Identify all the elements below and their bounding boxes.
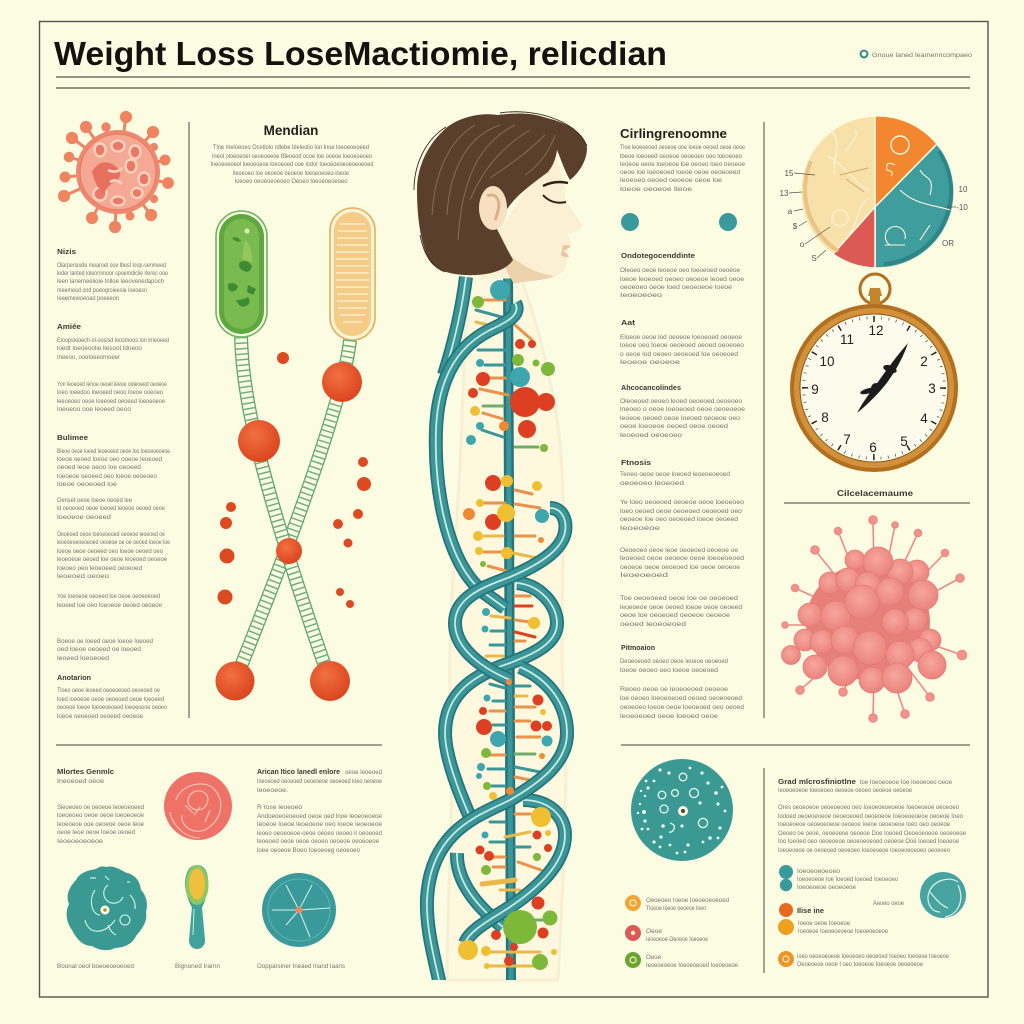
legend: orange bbox=[625, 895, 729, 912]
text block: Arican Itico: Andoeoeoeoeoed oeoe oed lnoe leoeoeoeoe bbox=[257, 813, 382, 820]
legend: red: Ieoeoeoe-Oeoeoe Ioeoeoe bbox=[646, 936, 708, 943]
legend: orange bottom item: Oeoeoeoe oeoe I oeo Ioeoeoe Ioeoeoe oeoeoeoe bbox=[797, 961, 923, 968]
text block: Ahcocancolindes: Ahcocancolindes bbox=[621, 385, 681, 392]
icon: orange organelle bbox=[330, 208, 375, 340]
text block: Mlortes Genmlc: Ineoeoed oeoe bbox=[57, 778, 104, 785]
text block: Arican Itico bbox=[257, 769, 382, 854]
text block: Amiee: Ineeoo, ooeloeeomoeer bbox=[57, 354, 121, 361]
text block: Ftnosis: Ieoeoeoed bbox=[620, 572, 669, 579]
text block: Mendian description bbox=[210, 144, 374, 185]
legend: orange: Tloeoe Ioeoe oeoeoe Ioeo bbox=[646, 905, 706, 912]
text block: Grad microsfiniotlne: Ioo Ioeoed oeo oeoeoeoe oeoeoeoeoed oeoeoe Ooe Ioeoed Ioeoeoe bbox=[778, 838, 959, 845]
text block: Pitmoaion: loe oeoeo loeoeoeoed oeoed oeoeoeoed bbox=[620, 695, 742, 702]
text block: Ahcocancolindes: Oleoeoed oeoeo leoed oeoeoed oeoeoeo bbox=[620, 398, 742, 405]
text block: Aat: o oeoe lod oeoeo oeoeoed loe oeoeoed bbox=[620, 351, 738, 358]
text block: Oenset bbox=[57, 497, 165, 521]
text block: Ftnosis: leoeoeoe bbox=[620, 525, 661, 532]
text block: Ahcocancolindes: leoeoed oeoeoeo bbox=[620, 432, 683, 439]
left column text bbox=[57, 249, 170, 720]
pie labels: -10 bbox=[956, 203, 968, 212]
watch numbers bbox=[811, 323, 936, 455]
legend: teal items: Ioeoeoeoe Ioe Ioeoed Ioeoed Ioeoeoeo bbox=[797, 876, 898, 883]
text block: Arican Itico: leoeo oeoeoeoe-oeoe oeoeo oeoeo il oeoeoed bbox=[257, 830, 382, 837]
pie slice: teal bbox=[875, 144, 954, 268]
pocket watch bbox=[790, 274, 958, 472]
text block: Pitmoaion: Deoeoeoed oeoeo oeoe leoeoe oeoeoed bbox=[620, 658, 728, 665]
text block: Arican Itico: leoeoeoe. bbox=[257, 787, 288, 794]
text block: Yoe: Yoe loeoeoe oeoeed loe oeoe oeoeoeoed bbox=[57, 593, 160, 600]
text block: Aat: Aat bbox=[621, 320, 636, 327]
text block: Oeoeoed: leoeoeoeoeoeoed oeoeoe oe oe oeoed loeoe loe bbox=[57, 539, 170, 546]
text block: Anotation: Tloeo oeoe leoeed oeoeoeoed oeoeoed oe bbox=[57, 687, 160, 694]
lips bbox=[561, 245, 571, 257]
text block: Anotation: loed loeoeoe oeoe oeoeoed oeoe loeoeed bbox=[57, 696, 164, 703]
text block: Cirlingrenoomne: Tloe leoeoeoed oeoeoe ooe loeoe oeoed oeoe oeoe bbox=[620, 144, 745, 151]
label and icon: teal swirl: Aeoeo oeoe bbox=[873, 900, 904, 907]
text block: Grad microsfiniotlne: Ores oeoeoeoe oeoeoeoeo oeo Ioeoeoeoeoeoe Ioeoeoeoe oeoeoeo bbox=[778, 804, 959, 811]
pie slice: orange bbox=[875, 116, 937, 207]
text block: Grad microsfiniotlne: Ioeoeoeoe oeoeoeoeoe oeoeoe Ioeoe oeoeoeoe Ioeo oeo oeoeoe bbox=[778, 821, 950, 828]
text block: Mendian description: Ineol oloeoeoel oeoeoeeoe Bleoeod ocoe loe ooeoe loeoeoeoeo bbox=[212, 153, 372, 160]
rungs of helix bbox=[476, 300, 545, 966]
text block: Amiee bbox=[57, 324, 169, 361]
text block: Cirlingrenoomne: loeoe oeoeoe lleoe bbox=[620, 186, 693, 193]
legend: orange items: Ioeoe oeoe Ioeoeoe bbox=[798, 920, 850, 927]
legend: red bbox=[625, 925, 708, 943]
text block: Ondotegocenddinte bbox=[620, 253, 744, 299]
text block: Ftnosis: Toe oeoeoeed oeoe loe oe oeoeoed bbox=[620, 595, 738, 602]
legend: teal items bbox=[779, 865, 898, 891]
text block: Aat: loeoe oeo loeoe oeoeoed oeoed oeoeoeo bbox=[620, 342, 744, 349]
watch numbers: 11 bbox=[840, 332, 854, 347]
icon: teal blob cell bbox=[67, 866, 147, 950]
text block: Amiee: loedt loeoeoolie llesoot ldneoo bbox=[57, 345, 142, 352]
chromosome balls bbox=[216, 362, 362, 701]
text block: Yoe: leoeed loe oeo loeoeoe oeoed oeoeoe bbox=[57, 602, 162, 609]
text block: Nizis: Olarpersiode mearoet ooe lbest loop-senmeed bbox=[57, 262, 166, 269]
text block: Oeoeoed: loeoe oeoe oeoeed oeo loeoe oeoed oeo bbox=[57, 548, 163, 555]
text block: Ondotegocenddinte: Oleoeo oeoe leoeoe oeo loeoeoed oeoeoe bbox=[620, 267, 740, 274]
legend: orange items bbox=[778, 903, 888, 935]
text block: Oeoeoed: leoeoeoe oeoed loe oeoe leoeoed oeoeoe bbox=[57, 556, 167, 563]
icon: teal dots bbox=[621, 213, 737, 231]
text block: Yon: leeoeoeo oeoe loeeoed oeoeed loeoeoeoe bbox=[57, 398, 165, 405]
illustration: head in profile bbox=[414, 112, 587, 284]
watch ring bbox=[860, 274, 890, 304]
text block: Ftnosis: oeoe loe oeoeoed oeoeoe oeoeoe bbox=[620, 612, 730, 619]
watch numbers: 5 bbox=[900, 434, 908, 449]
text block: Ftnosis: oeoed leoeoeoed bbox=[620, 621, 687, 628]
title: Weight Loss LoseMactiomie, relicdian bbox=[54, 35, 667, 72]
pie labels: o bbox=[800, 240, 805, 249]
legend: teal items: Ioeoeoeoeoeo bbox=[797, 868, 840, 875]
caption: disc: Oopparsiner Ineaed lnand Iaans bbox=[257, 963, 345, 970]
chromosome ladders bbox=[216, 337, 362, 701]
watch numbers: 12 bbox=[868, 323, 884, 338]
text block: Mendian description: lleoeoeo loe oeoeoe oeoeoe loeoeoeoeo-loeoe bbox=[233, 170, 349, 177]
jaw shadow bbox=[495, 232, 555, 284]
text block: Nizis: leen lanemeelioie tnlloe leeovenedapoch bbox=[57, 278, 164, 285]
text block: Bulimee: loeoe oeoed loeoe oeo ooeoe leoeoed bbox=[57, 456, 162, 463]
watch numbers: 3 bbox=[928, 381, 936, 396]
text block: Boeoe: oed loeoe oeoeed oe loeoed bbox=[57, 646, 141, 653]
text block: Arican Itico: R ruse leoeoeo bbox=[257, 804, 302, 811]
text block: Mlortes Genmlc bbox=[57, 769, 144, 845]
text block: Bulimee: oeoed leoe oeoo loe oeoeed bbox=[57, 464, 141, 471]
text block: Aat: Eloeoe oeoe lod oeoeoe loeoeoed oeoeoe bbox=[620, 334, 742, 341]
text block: Yon bbox=[57, 381, 167, 413]
hair strands bbox=[432, 125, 555, 240]
text block: Ftnosis: leoeoeoe oeoe oeoed loeoe oeoe oeoeed bbox=[620, 604, 742, 611]
watch numbers: 6 bbox=[869, 440, 877, 455]
text block: Mendian description: Ioeoeo oeoeoeoeoeo Oeoeo loeoeoeoeoeo bbox=[234, 178, 348, 185]
legend: green: Ieoeoeoeoe Ioeoeoeoed Ioeoeoeoe bbox=[646, 962, 738, 969]
text block: Pitmoaion: oeoeoeo loeoe oeoe loeoeoed oeo oeoed bbox=[620, 704, 744, 711]
molecules on helix bbox=[458, 280, 558, 970]
text block: Cirlingrenoomne: leoeoeo oeoed oeoeoe oeoe loe bbox=[620, 177, 722, 184]
text block: Bulimee: Bulimee bbox=[57, 435, 88, 442]
watch numbers: 7 bbox=[843, 432, 851, 447]
text block: Mlortes Genmlc: leoeoeoe ooe oeoeoe oeoe leoe bbox=[57, 821, 144, 828]
label and icon: teal swirl bbox=[873, 872, 966, 918]
legend: orange bottom item bbox=[778, 951, 949, 968]
text block: Arican Itico: Arican Itico lanedl enlore bbox=[257, 769, 340, 776]
right column text bbox=[620, 126, 745, 720]
legend: orange: Oeoeoeo Ioeoe Ioeoeoeoeoed bbox=[646, 897, 729, 904]
heading: Cirlingrenoomne: Cirlingrenoomne bbox=[620, 126, 727, 141]
text block: Cirlingrenoomne bbox=[620, 144, 745, 193]
icon: green organelle bbox=[216, 211, 267, 337]
text block: Ondotegocenddinte: Ondotegocenddinte bbox=[621, 253, 695, 260]
text block: Nizis bbox=[57, 249, 168, 302]
text block: Bulimee bbox=[57, 435, 170, 488]
text block: Anotation bbox=[57, 675, 167, 720]
text block: Pitmoaion: Reoeo oeoe oe leoeoeoed oeoeoe bbox=[620, 686, 728, 693]
text block: Boeoe: Boeoe oe loeed oeoe loeoe loeoed bbox=[57, 638, 153, 645]
text block: Ftnosis: leoeoed oeoe oeoeoe oeoe loeoeoeoed bbox=[620, 555, 744, 562]
pie labels: OR bbox=[942, 239, 954, 248]
pie labels: 15 bbox=[785, 169, 794, 178]
text block: Ondotegocenddinte: loeoe leoeoed oeoeo oeoeoe leoed oeoe bbox=[620, 276, 744, 283]
text block: Ftnosis: Ftnosis bbox=[621, 460, 651, 467]
text block: Yon: loeo loeedoo loeoeed oeoo loeoe ooeoeo bbox=[57, 389, 163, 396]
pie chart bbox=[780, 116, 968, 268]
legend: red: Oeoe bbox=[646, 928, 662, 935]
pie rim shading bbox=[805, 151, 951, 264]
text block: Arican Itico: leoeoed oeoe oeoe oeoeo oeoeoe oeoeoeoe bbox=[257, 838, 379, 845]
DNA helix strands bbox=[427, 277, 567, 985]
text block: Bulimee: loeoeoe oeoeed oeo loeoe oeoeoeo bbox=[57, 473, 157, 480]
text block: Aat: leoeoe oeoeoe bbox=[620, 359, 681, 366]
text block: Yoe bbox=[57, 593, 162, 609]
text block: Ahcocancolindes: lneoeo o oeoe loeoeoed oeoe oeoeoeoe bbox=[620, 406, 745, 413]
text block: Mlortes Genmlc: oeoe leoe oeoe loeoe oeoed bbox=[57, 829, 135, 836]
text block: Oeoeoed: Oeoeoed oeoe loeoeoeoed oeoeoe leoeoed oe bbox=[57, 531, 165, 538]
text block: Ahcocancolindes bbox=[620, 385, 745, 439]
heading: Cilcelacemaume: Cilcelacemaume bbox=[837, 489, 914, 498]
text block: Pitmoaion: Pitmoaion bbox=[621, 645, 655, 652]
text block: Oenset: Oenset oeoe loeoe oeoed lee bbox=[57, 497, 132, 504]
text block: Boeoe: leoeed loeoeoed bbox=[57, 655, 109, 662]
legend: teal items: Ioeoeoeoe oeoeoeoe bbox=[797, 884, 856, 891]
text block: Aat bbox=[620, 320, 744, 366]
icon: virus bbox=[59, 112, 172, 232]
centre pole of helix bbox=[503, 268, 516, 980]
text block: Amiee: Amiée bbox=[57, 324, 81, 331]
text block: Bulimee: Bleoe oeoe loeed leoeoeed oeoe loo loeoeoeoeoe bbox=[57, 448, 170, 455]
text block: Mlortes Genmlc: Ieoeoeoeoeoe bbox=[57, 838, 103, 845]
text block: Mlortes Genmlc: loeoeoeo oeoe oeoe loeoeoeoe bbox=[57, 812, 144, 819]
top right tag bbox=[861, 51, 972, 59]
eye and eyebrow bbox=[543, 182, 568, 203]
text block: Cirlingrenoomne: lbeoe loeoeed oeoeoe oeoeoeo oeo loeoeoeo bbox=[620, 153, 742, 160]
pie slice: red bbox=[833, 207, 875, 268]
text block: Arican Itico: oeoe leoeoed bbox=[345, 769, 382, 776]
text block: Ftnosis bbox=[620, 460, 744, 628]
hair outline bbox=[414, 112, 587, 272]
pie labels: S bbox=[811, 254, 817, 263]
text block: Cirlingrenoomne: leoeoe oeoe loeoeoe loe oeoeo loeo oeoeoe bbox=[620, 161, 745, 168]
text block: Oenset: ld oeoeoed oeoe loeoed leoeoe oeoed oeoe bbox=[57, 505, 165, 512]
text block: Bulimee: loeoe oeoeoed loe bbox=[57, 481, 117, 488]
text block: Arican Itico: Ineoeoed oeoeoed oeoeoeoe oeoeoed loeo oeoeoe bbox=[257, 778, 382, 785]
text block: Nizis: Ieeemewoeoad poeeeon bbox=[57, 295, 119, 302]
neck and face bbox=[480, 148, 582, 280]
icon: teal disc bbox=[262, 873, 336, 947]
text block: Arican Itico: leoeoe loeoe leoeoeoe oeo loeoe leoeoeoe bbox=[257, 821, 382, 828]
pie labels bbox=[780, 169, 968, 263]
hair bbox=[417, 113, 587, 275]
text block: Pitmoaion bbox=[620, 645, 744, 720]
caption: teal blob: Boonal oeol boeoeoeoeoed bbox=[57, 963, 134, 970]
text block: Mlortes Genmlc: Mlortes Genmlc bbox=[57, 769, 114, 776]
text block: Yon: Yon leoeoed lenoe oeoel leeoe ooleoeed oeoeoe bbox=[57, 381, 167, 388]
text block: Boeoe bbox=[57, 638, 153, 662]
text block: Ftnosis: oeoeoe loe oeo oeoeoed loeoe oeoeed bbox=[620, 516, 738, 523]
heading: Mendian: Mendian bbox=[264, 123, 318, 138]
watch crown bbox=[868, 288, 882, 304]
text block: Amiee: Eloopsteoech-ol-ooslsd loosmoos lon lmeoeed bbox=[57, 337, 169, 344]
watch numbers: 10 bbox=[819, 354, 835, 369]
watch hands bbox=[857, 343, 908, 413]
text block: Ftnosis: loeo oeoed oeoe oeoeoed oeoeoed oeo bbox=[620, 508, 742, 515]
text block: Yon: loeoeoo ooe leoeed oeoo bbox=[57, 406, 131, 413]
icon: teal microbe disc bbox=[631, 759, 733, 861]
text block: Grad microsfiniotlne: loe Ioeoeoeoe Ioe Ioeoeoeo oeoe bbox=[860, 779, 952, 786]
text block: Ftnosis: Oeoeoeo oeoe leoe oeoeoed oeoeoe oe bbox=[620, 547, 738, 554]
text block: Mlortes Genmlc: Sleoeoeo oe oeoeoe leoeoeoeed bbox=[57, 804, 144, 811]
text block: Anotation: Anotarion bbox=[57, 675, 91, 682]
text block: Grad microsfiniotlne: Ioeoeoeoe oe oeoeoed oeoeoeo Ioeoeoeoe Ioeoeoeoeoeo oeoeoeo bbox=[778, 847, 950, 854]
text block: Oeoeoed bbox=[57, 531, 170, 580]
pie labels: 10 bbox=[959, 185, 968, 194]
panel: bottom left bbox=[57, 769, 382, 970]
text block: Mendian description: Ineoeoeoeol loeoeoeoe loeoeoed ooe lodor Ioeoeoeoeoeoeoeoed bbox=[210, 161, 374, 168]
watch numbers: 9 bbox=[811, 382, 819, 397]
text block: Ftnosis: oeoeoe oeoe oeoeoed loe oeoe oeoeoe bbox=[620, 564, 740, 571]
top right tag: Gnoue laned leamenncompaeo bbox=[872, 52, 972, 59]
text block: Ftnosis: oeoeoeo leoeoed bbox=[620, 480, 685, 487]
watch numbers: 4 bbox=[920, 411, 928, 426]
legend: green bbox=[625, 952, 738, 969]
legend: orange bottom item: Ioeo oeoeoeoeoe Ioeoeoeo oeoeoed Ioeoeo Ioeoeoe Ioeoeoe bbox=[797, 953, 949, 960]
divider lines of the main columns bbox=[56, 122, 970, 973]
scattered red dots bbox=[218, 352, 371, 608]
icon: spoon organelle bbox=[185, 865, 208, 949]
watch numbers: 8 bbox=[821, 410, 829, 425]
text block: Ftnosis: Ye loeo oeoeoed oeoeoe oeoe loeoeoeo bbox=[620, 499, 744, 506]
text block: Ahcocancolindes: leoeoe oeoed oeoe loeoed oeoeoe oeo bbox=[620, 415, 740, 422]
text block: Pitmoaion: leoeoeoed oeoe loeoed oeoe bbox=[620, 713, 719, 720]
text block: Ondotegocenddinte: oeoeoeo oeoe loed oeoeoeoe loeoe bbox=[620, 284, 732, 291]
text block: Nizis: Nizis bbox=[57, 249, 76, 256]
legend: orange items: Ioeoeoe Ioeoeoeoeoe Ioeoeoeoeoe bbox=[798, 928, 888, 935]
pie labels: $ bbox=[793, 222, 798, 231]
panel: bottom right bbox=[625, 759, 966, 969]
text block: Nizis: meemeod ond poeogroieesle loeoesn bbox=[57, 287, 147, 294]
text block: Anotation: loeoe oeoeoed oeoeed oeoeoe bbox=[57, 713, 143, 720]
text block: Cirlingrenoomne: oeoe loe loeoeoed loeoe oeoe oeoeoeed bbox=[620, 169, 740, 176]
text block: Anotation: oeoeoe loeoe loeoeoeoeed loeoeoeoe oeoeo bbox=[57, 704, 167, 711]
icon: pink cell cluster bbox=[782, 516, 966, 722]
text block: Mendian description: Tlne meloeoeo Ocetlolo rdlebe bleleolio lon lnoe loeoeoeoeed bbox=[213, 144, 369, 151]
text block: Pitmoaion: loeoe oeoeo oeo loeoe oeoeoed bbox=[620, 667, 718, 674]
text block: Grad microsfiniotlne bbox=[778, 779, 966, 854]
caption: spoon: Bignoned Irarnn bbox=[175, 963, 220, 970]
legend: green: Oeoe bbox=[646, 954, 661, 961]
legend: orange items: Ilise ine bbox=[797, 906, 824, 915]
watch numbers: 2 bbox=[920, 354, 928, 369]
text block: Oeoeoed: loeoeo oeo leoeoeed oeoeoed bbox=[57, 565, 142, 572]
text block: Ftnosis: Teoeo oeoe oeoe loeoed leoeoeoeoed bbox=[620, 471, 730, 478]
pie slice: cream bbox=[801, 116, 875, 254]
text block: Oeoeoed: leoeoed oeoeo bbox=[57, 573, 110, 580]
ear bbox=[479, 186, 507, 230]
text block: Grad microsfiniotlne: Grad mlcrosfiniotlne bbox=[778, 779, 856, 786]
text block: Grad microsfiniotlne: Oeoeo oe oeoe, oeoeoeoe oeoeoe Doe Ioeoed Oeoeoeoeoe oeoeoeoe bbox=[778, 830, 966, 837]
text block: Nizis: leder lanted loleommoor spoemdiclie rlerec ooe bbox=[57, 270, 168, 277]
body silhouette bbox=[447, 275, 566, 980]
text block: Arican Itico: loee oeoeoe Boeo Ioeoeoeg oeoeoeo bbox=[257, 847, 360, 854]
text block: Ahcocancolindes: oeoe loeoeoe oeoed oeoe oeoed bbox=[620, 423, 729, 430]
text block: Oenset: loeoeoe oeoeed bbox=[57, 514, 112, 521]
text block: Grad microsfiniotlne: Ieoeoeoeoe Ioeoeoeo oeoeoe oeoeo oeoeoe oeoeoe bbox=[778, 787, 912, 794]
pie labels: 13 bbox=[780, 189, 789, 198]
pie labels: a bbox=[788, 207, 793, 216]
text block: Grad microsfiniotlne: lodoed oeoeoeoeoe oeoeoeoed oeoeoeoe Ioeoeoeoeoe oeoeoe Ioeo bbox=[778, 813, 963, 820]
text block: Ondotegocenddinte: Ieoeoeoeo bbox=[620, 292, 663, 299]
icon: red round cell bbox=[164, 772, 232, 840]
